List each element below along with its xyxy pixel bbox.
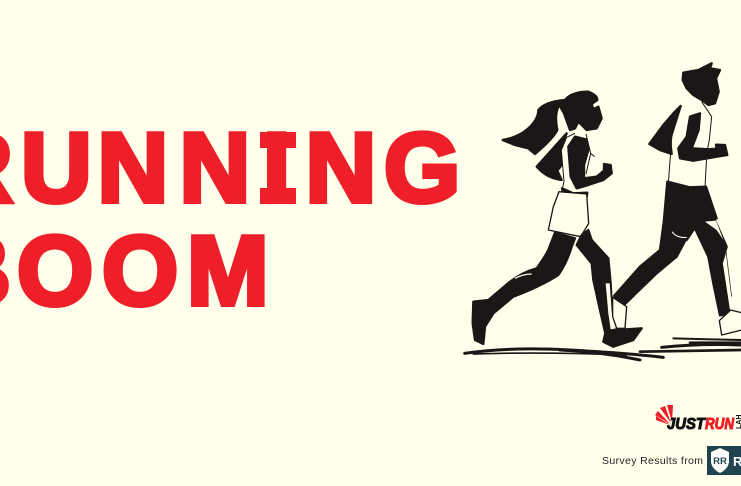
logo badge: RR: RR (713, 456, 727, 467)
logo: Just Run Lah: JUST (667, 416, 706, 433)
woman front leg (577, 230, 642, 347)
woman runner (473, 92, 642, 347)
illustration: two runners (465, 63, 741, 360)
icon: red burst (655, 405, 673, 425)
icon: shield (711, 448, 729, 473)
woman torso outline (561, 133, 595, 190)
ground scribbles (465, 338, 741, 360)
man front leg (695, 221, 729, 315)
woman back leg (473, 233, 575, 344)
man back leg (614, 225, 687, 304)
title: Running Boom (0, 112, 460, 326)
survey credit text: Survey Results from (602, 455, 703, 467)
woman shorts (548, 192, 589, 237)
logo: Just Run Lah: RUN (705, 416, 734, 433)
logo badge: RR (707, 446, 741, 475)
logo: Just Run Lah (655, 405, 741, 433)
man shorts (663, 182, 717, 240)
man torso outline (668, 102, 712, 187)
man shoes (719, 310, 741, 335)
man runner (613, 63, 741, 335)
